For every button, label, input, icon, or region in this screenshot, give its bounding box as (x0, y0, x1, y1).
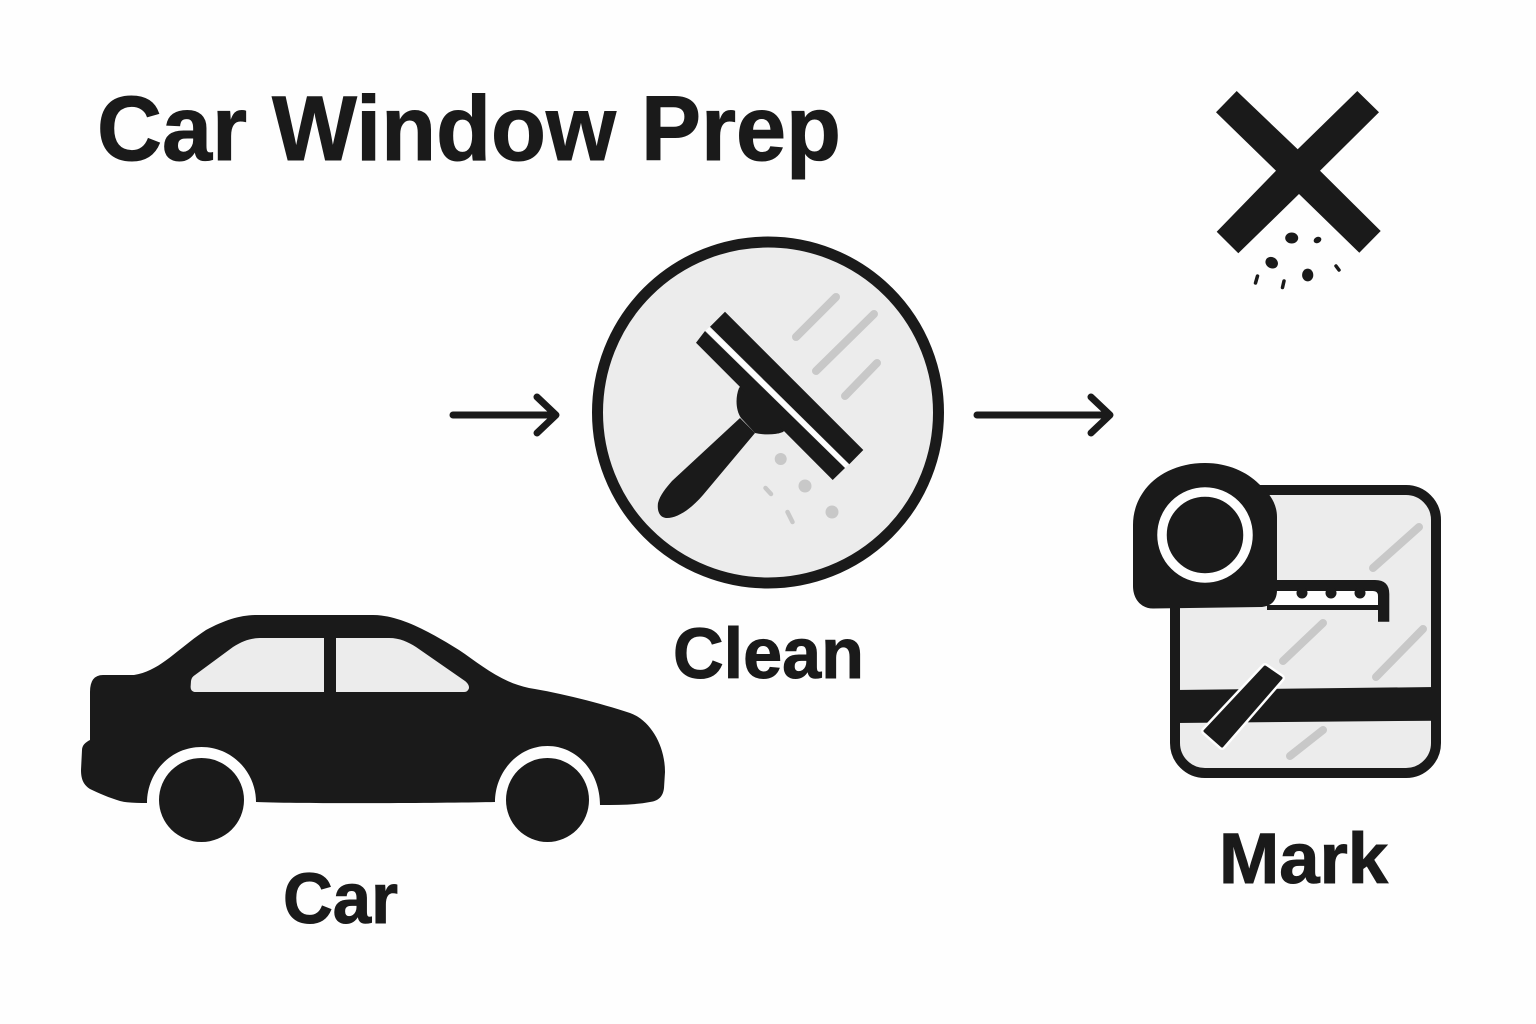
arrow: clean to mark (977, 397, 1110, 433)
label: Mark: Mark (1219, 820, 1389, 899)
car body (81, 615, 665, 805)
glass reflections (1283, 527, 1423, 756)
window pane (1175, 490, 1436, 773)
front wheel (506, 758, 589, 842)
rear wheel (159, 758, 244, 842)
window streaks (796, 297, 877, 396)
front window (336, 638, 469, 692)
dirt specks (766, 453, 838, 522)
arrow: car to clean (453, 397, 556, 433)
icon: car (81, 615, 665, 842)
marker tool (1205, 667, 1281, 746)
tape measure ring (1162, 492, 1248, 578)
marking band (1175, 687, 1436, 723)
tape blade (1265, 580, 1389, 622)
icon: dust particles (1256, 232, 1339, 288)
icon: marked window with tape measure (1133, 463, 1436, 773)
label: Clean: Clean (673, 615, 864, 694)
squeegee (658, 312, 863, 518)
icon: crossed-out dust (1216, 91, 1381, 288)
rear window (191, 638, 324, 692)
tape measure body (1133, 463, 1277, 608)
icon: X mark (1216, 91, 1381, 253)
icon: squeegee in circle (598, 242, 938, 583)
circle background (598, 242, 938, 583)
title: Car Window Prep (97, 78, 841, 180)
label: Car: Car (283, 860, 398, 939)
